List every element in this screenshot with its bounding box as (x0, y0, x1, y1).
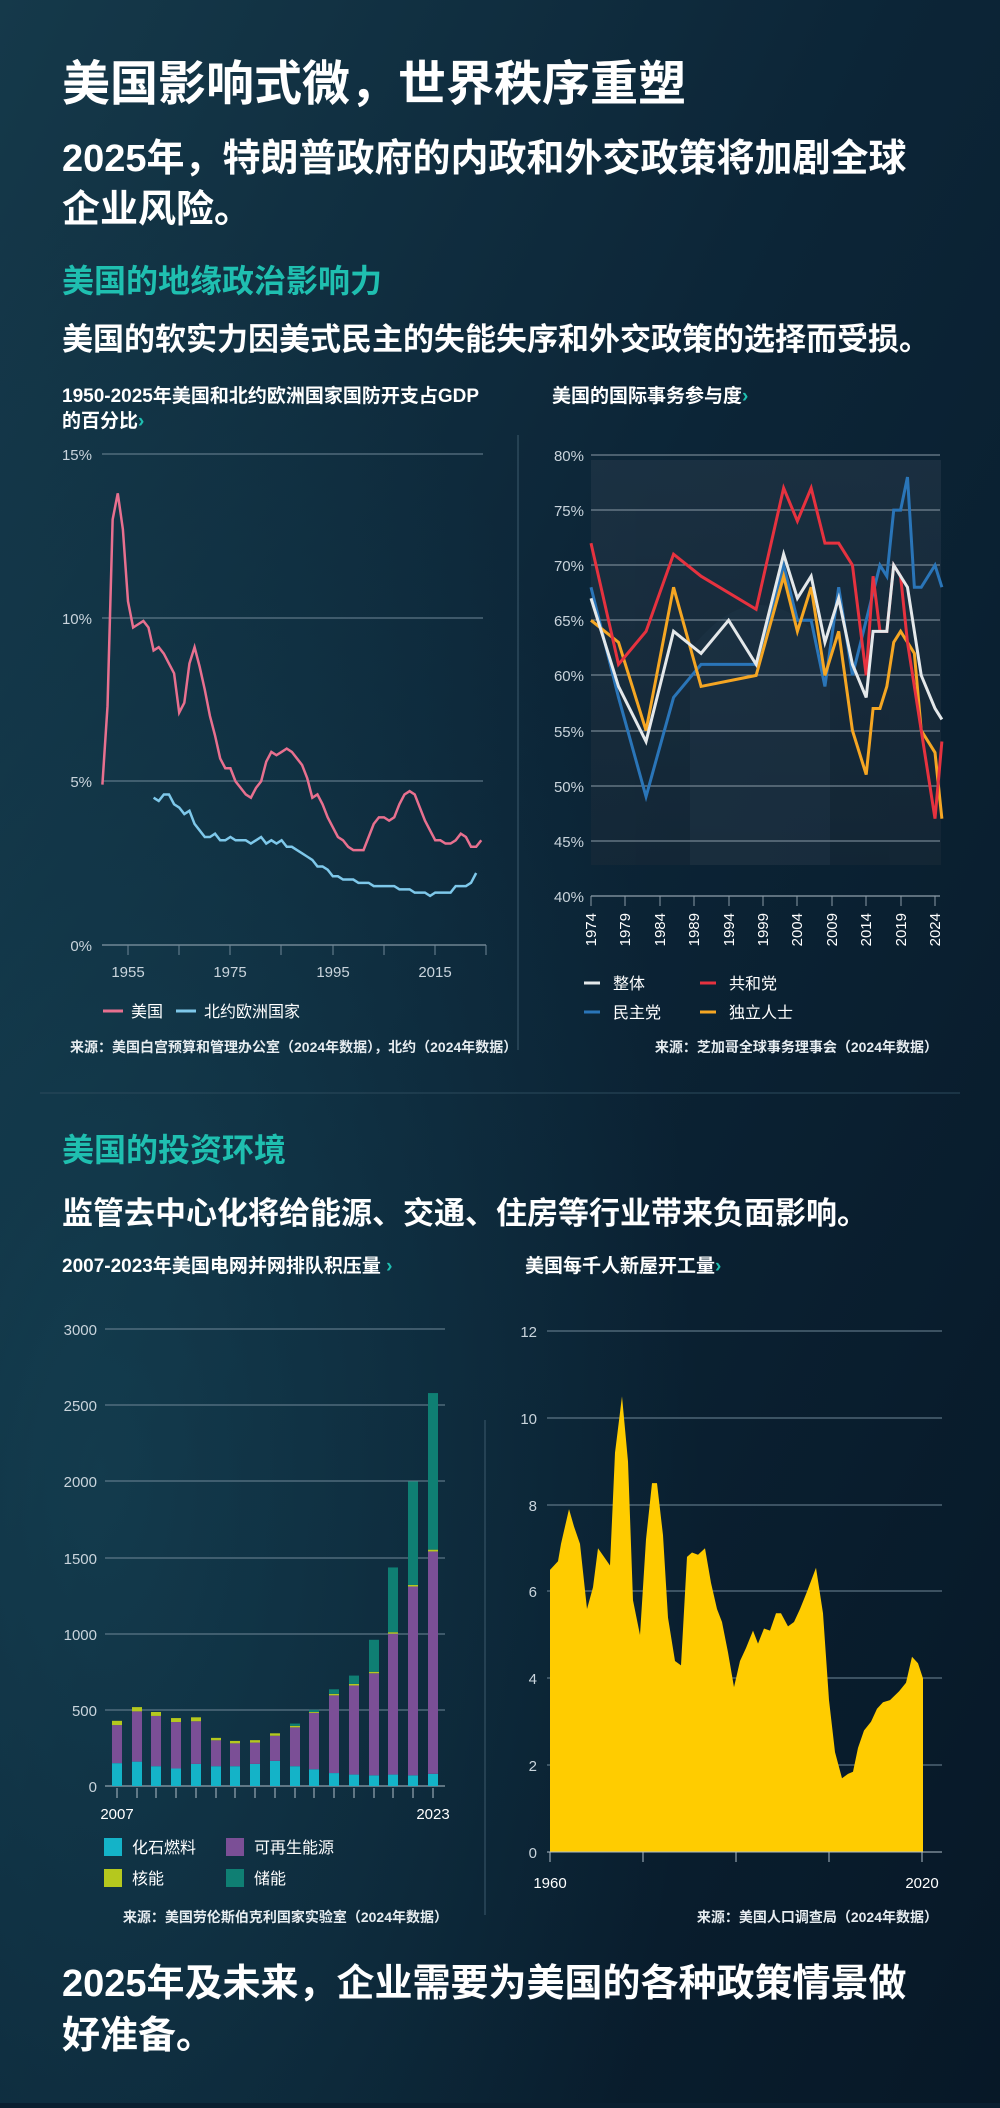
chart title: 2007-2023年美国电网并网排队积压量 › (62, 1254, 392, 1277)
line: NATO Europe (154, 794, 476, 896)
panel: interconnection queue bar chart: 500 (72, 1703, 97, 1720)
panel: housing starts area chart: 6 (529, 1584, 537, 1601)
chart title: 美国每千人新屋开工量› (525, 1255, 721, 1277)
panel: international engagement chart: 2019 (893, 913, 910, 946)
panel: defense spending chart: 1955 (111, 964, 145, 981)
panel: housing starts area chart: 10 (520, 1411, 537, 1428)
panel: international engagement chart: 1984 (652, 913, 669, 946)
panel: interconnection queue bar chart: 2500 (64, 1398, 97, 1415)
line: overall (591, 554, 942, 742)
panel: interconnection queue bar chart: 2007 (100, 1806, 134, 1823)
panel: defense spending chart: 15% (62, 447, 92, 464)
panel: international engagement chart: 40% (554, 889, 584, 906)
panel: interconnection queue bar chart: 1500 (64, 1551, 97, 1568)
panel: housing starts area chart: 2020 (905, 1875, 939, 1892)
legend (104, 1838, 334, 1888)
panel: international engagement chart: 80% (554, 448, 584, 465)
panel: international engagement chart: 2009 (824, 913, 841, 946)
source: 来源：美国人口调查局（2024年数据） (697, 1909, 938, 1925)
panel: international engagement chart: 65% (554, 613, 584, 630)
conclusion: 2025年及未来，企业需要为美国的各种政策情景做 (62, 1963, 907, 2005)
source: 来源：美国劳伦斯伯克利国家实验室（2024年数据） (123, 1909, 448, 1925)
panel: defense spending chart: 5% (70, 774, 92, 791)
panel: international engagement chart: 55% (554, 724, 584, 741)
panel: international engagement chart: 2024 (927, 913, 944, 946)
panel: international engagement chart: 1989 (686, 913, 703, 946)
legend: 北约欧洲国家 (204, 1003, 300, 1021)
chart title: 1950-2025年美国和北约欧洲国家国防开支占GDP (62, 384, 479, 407)
panel: housing starts area chart: 2 (529, 1758, 537, 1775)
panel: international engagement chart: 75% (554, 503, 584, 520)
line: Democrats (591, 477, 942, 797)
conclusion (62, 1963, 907, 2057)
title: 美国影响式微，世界秩序重塑 (62, 58, 686, 111)
subtitle (62, 138, 907, 231)
panel: interconnection queue bar chart: 2023 (416, 1806, 450, 1823)
subtitle: 企业风险。 (62, 189, 252, 231)
line: US (102, 493, 481, 850)
legend: 共和党 (729, 975, 777, 993)
conclusion: 好准备。 (62, 2015, 214, 2057)
legend (103, 1003, 300, 1021)
panel: international engagement chart: 2004 (789, 913, 806, 946)
panel: international engagement chart: 60% (554, 668, 584, 685)
chart title (62, 384, 479, 432)
section heading: geopolitics: 美国的地缘政治影响力 (62, 263, 382, 299)
panel: international engagement chart: 1979 (617, 913, 634, 946)
chart title: 的百分比› (62, 410, 144, 432)
legend (584, 975, 793, 1022)
panel: international engagement chart: 2014 (858, 913, 875, 946)
panel: interconnection queue bar chart: 3000 (64, 1322, 97, 1339)
panel: international engagement chart: 50% (554, 779, 584, 796)
panel: housing starts area chart: 4 (529, 1671, 537, 1688)
section subheading: 美国的软实力因美式民主的失能失序和外交政策的选择而受损。 (62, 322, 930, 357)
line: Republicans (591, 488, 942, 819)
panel: housing starts area chart: 12 (520, 1324, 537, 1341)
legend: 整体 (613, 975, 645, 993)
panel: defense spending chart: 0% (70, 938, 92, 955)
background photo (capitol) (591, 460, 941, 865)
panel: defense spending chart: 1975 (213, 964, 247, 981)
panel: international engagement chart: 45% (554, 834, 584, 851)
source: 来源：美国白宫预算和管理办公室（2024年数据），北约（2024年数据） (70, 1039, 517, 1055)
panel: housing starts area chart: 0 (529, 1845, 537, 1862)
panel: interconnection queue bar chart: 1000 (64, 1627, 97, 1644)
panel: defense spending chart: 2015 (418, 964, 452, 981)
panel: housing starts area chart: 8 (529, 1498, 537, 1515)
line: Independents (591, 576, 942, 819)
panel: international engagement chart: 1999 (755, 913, 772, 946)
source: 来源：芝加哥全球事务理事会（2024年数据） (655, 1039, 938, 1055)
panel: defense spending chart (62, 384, 517, 1055)
panel: interconnection queue bar chart: 2000 (64, 1474, 97, 1491)
legend: 独立人士 (729, 1004, 793, 1022)
subtitle: 2025年，特朗普政府的内政和外交政策将加剧全球 (62, 138, 907, 180)
panel: international engagement chart: 1974 (583, 913, 600, 946)
legend: 储能 (254, 1870, 286, 1888)
section subheading: 监管去中心化将给能源、交通、住房等行业带来负面影响。 (62, 1196, 868, 1231)
panel: housing starts area chart (520, 1255, 942, 1925)
panel: international engagement chart (552, 384, 944, 1055)
section heading: investment: 美国的投资环境 (62, 1132, 286, 1168)
legend: 化石燃料 (132, 1839, 196, 1857)
legend: 美国 (131, 1003, 163, 1021)
legend: 民主党 (613, 1004, 661, 1022)
legend: 核能 (132, 1870, 164, 1888)
panel: housing starts area chart: 1960 (533, 1875, 567, 1892)
legend: 可再生能源 (254, 1839, 334, 1857)
panel: defense spending chart: 1995 (316, 964, 350, 981)
panel: interconnection queue bar chart: 0 (89, 1779, 97, 1796)
panel: defense spending chart: 10% (62, 611, 92, 628)
panel: international engagement chart: 70% (554, 558, 584, 575)
chart title: 美国的国际事务参与度› (552, 384, 748, 407)
panel: interconnection queue bar chart (62, 1254, 450, 1925)
panel: international engagement chart: 1994 (721, 913, 738, 946)
